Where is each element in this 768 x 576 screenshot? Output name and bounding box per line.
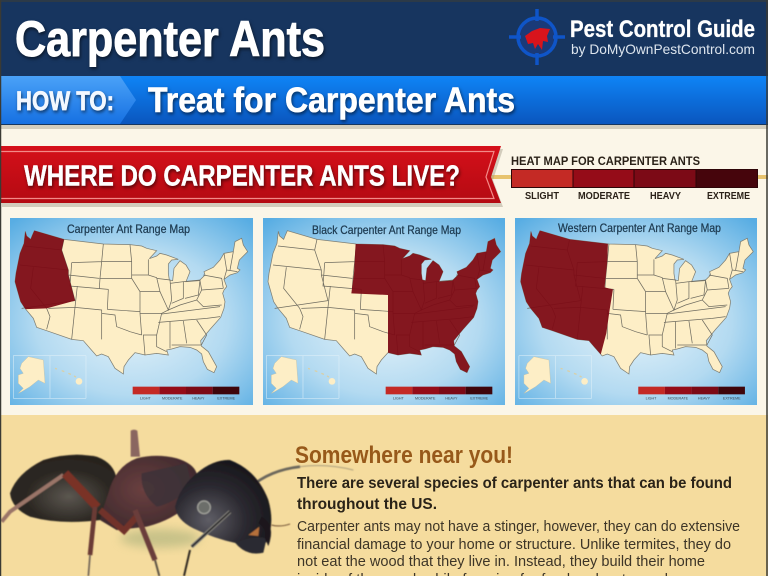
- map: mountain and pacific states shaded: MODERATE: [668, 397, 689, 401]
- how-to arrow tab: [0, 76, 136, 124]
- title: Carpenter Ants: [15, 11, 325, 67]
- map: mountain and pacific states shaded: [518, 230, 754, 400]
- how-to heading: Treat for Carpenter Ants: [148, 81, 515, 120]
- legend labels: SLIGHT: [525, 191, 559, 202]
- map: western states shaded: HEAVY: [192, 397, 205, 401]
- panel: carpenter ant range map: [0, 210, 253, 405]
- map: western states shaded: MODERATE: [162, 397, 183, 401]
- map: mountain and pacific states shaded: HEAVY: [698, 397, 711, 401]
- how-to arrow tab: HOW TO:: [16, 86, 114, 116]
- map: western states shaded: EXTREME: [217, 397, 236, 401]
- lead paragraph: throughout the US.: [297, 496, 437, 513]
- icon: crosshair with red ant: [509, 9, 565, 65]
- body paragraph: [297, 518, 740, 576]
- panel: somewhere near you: [0, 415, 768, 576]
- map title: Western Carpenter Ant Range Map: [558, 221, 721, 235]
- section banner: where do carpenter ants live: [0, 146, 503, 207]
- icon: carpenter ant: [2, 430, 353, 576]
- map: eastern states shaded: MODERATE: [415, 397, 436, 401]
- header bar: [0, 0, 768, 76]
- legend color bar: [511, 169, 758, 188]
- legend labels: EXTREME: [707, 191, 750, 202]
- gold connector line: [488, 175, 768, 179]
- panel: western carpenter ant range map: [506, 210, 757, 405]
- map title: Carpenter Ant Range Map: [67, 222, 190, 236]
- map: eastern states shaded: HEAVY: [445, 397, 458, 401]
- legend labels: HEAVY: [650, 191, 681, 202]
- legend labels: [525, 191, 750, 202]
- map: eastern states shaded: LIGHT: [393, 397, 405, 401]
- legend title: HEAT MAP FOR CARPENTER ANTS: [511, 156, 700, 168]
- heat map legend: [511, 156, 758, 202]
- map title: Black Carpenter Ant Range Map: [312, 223, 461, 237]
- lead paragraph: There are several species of carpenter ants that can be found: [297, 475, 732, 492]
- lead paragraph: [297, 475, 732, 513]
- map: western states shaded: LIGHT: [140, 397, 152, 401]
- legend labels: MODERATE: [578, 191, 630, 202]
- map: eastern states shaded: [266, 227, 520, 401]
- logo byline: by DoMyOwnPestControl.com: [571, 41, 755, 57]
- heading: Somewhere near you!: [295, 442, 513, 469]
- map: mountain and pacific states shaded: EXTREME: [723, 397, 741, 401]
- body paragraph: financial damage to your home or structure. Unlike termites, they do: [297, 536, 731, 553]
- map: mountain and pacific states shaded: LIGHT: [646, 397, 657, 401]
- body paragraph: Carpenter ants may not have a stinger, however, they can do extensive: [297, 518, 740, 535]
- panel: black carpenter ant range map: [263, 218, 520, 405]
- section banner: where do carpenter ants live: WHERE DO CARPENTER ANTS LIVE?: [24, 160, 460, 192]
- logo: pest control guide: [509, 9, 755, 65]
- map: western states shaded: [13, 230, 248, 400]
- map: eastern states shaded: EXTREME: [470, 397, 489, 401]
- body paragraph: not eat the wood that they live in. Instead, they build their home: [297, 553, 705, 570]
- how-to bar: [0, 76, 768, 129]
